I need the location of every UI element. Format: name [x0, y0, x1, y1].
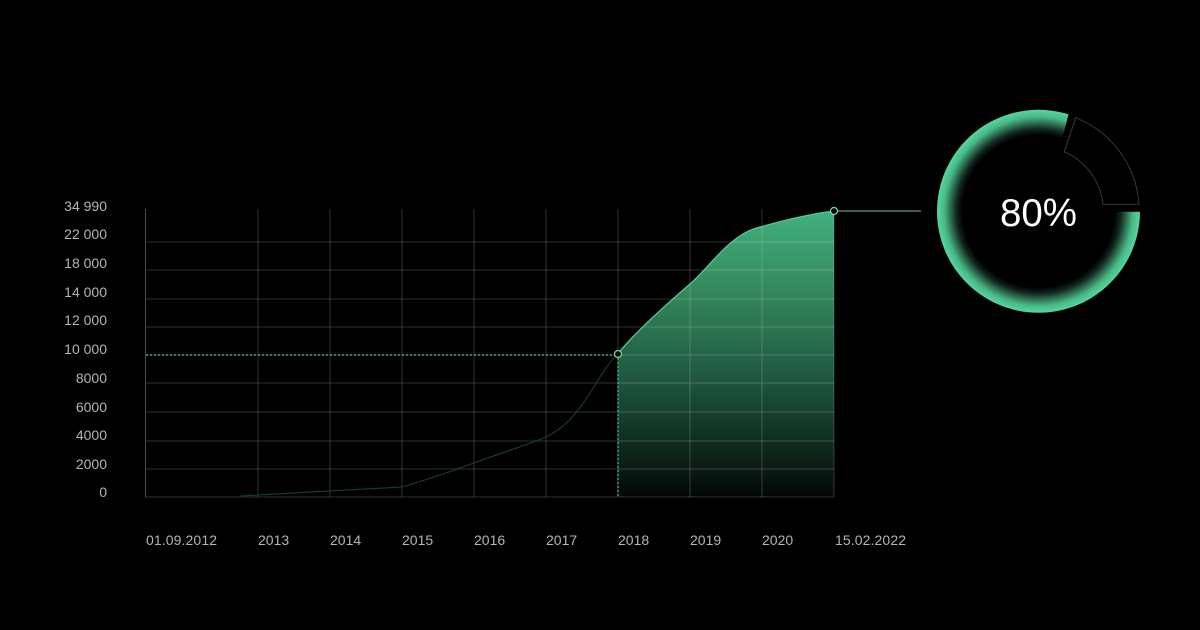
- y axis labels: 18 000: [64, 255, 107, 271]
- y axis labels: 8000: [76, 370, 107, 386]
- chart grid: [145, 209, 834, 497]
- x axis labels: 2017: [546, 532, 577, 548]
- y axis labels: 6000: [76, 399, 107, 415]
- data point end: [830, 208, 838, 214]
- y axis labels: 4000: [76, 427, 107, 443]
- x axis labels: 2014: [330, 532, 361, 548]
- x axis labels: 2018: [618, 532, 649, 548]
- connector line to ring: [838, 210, 921, 212]
- y axis labels: 2000: [76, 456, 107, 472]
- y axis labels: 12 000: [64, 312, 107, 328]
- x axis labels: 15.02.2022: [835, 532, 906, 548]
- x axis labels: 2016: [474, 532, 505, 548]
- x axis labels: 01.09.2012: [146, 532, 217, 548]
- y axis labels: 34 990: [64, 198, 107, 214]
- x axis labels: 2020: [762, 532, 793, 548]
- early growth curve: [240, 354, 618, 496]
- dotted guide: horizontal: [146, 354, 615, 356]
- x axis labels: 2015: [402, 532, 433, 548]
- gauge filled arc: [937, 110, 1140, 313]
- y axis labels: [64, 198, 107, 500]
- data point 2018: [614, 350, 622, 358]
- gauge remaining segment: [1064, 118, 1139, 204]
- x axis labels: 2019: [690, 532, 721, 548]
- dotted guide: vertical: [617, 358, 619, 497]
- x axis labels: [146, 532, 906, 548]
- highlighted curve: [618, 211, 834, 354]
- y axis labels: 0: [99, 484, 107, 500]
- y axis labels: 14 000: [64, 284, 107, 300]
- area under curve: [618, 211, 834, 497]
- x axis labels: 2013: [258, 532, 289, 548]
- y axis labels: 10 000: [64, 341, 107, 357]
- y axis labels: 22 000: [64, 226, 107, 242]
- donut gauge 80%: [937, 110, 1140, 313]
- gauge value: 80%: [1000, 192, 1077, 235]
- left axis: [144, 209, 146, 497]
- line chart: [145, 208, 921, 497]
